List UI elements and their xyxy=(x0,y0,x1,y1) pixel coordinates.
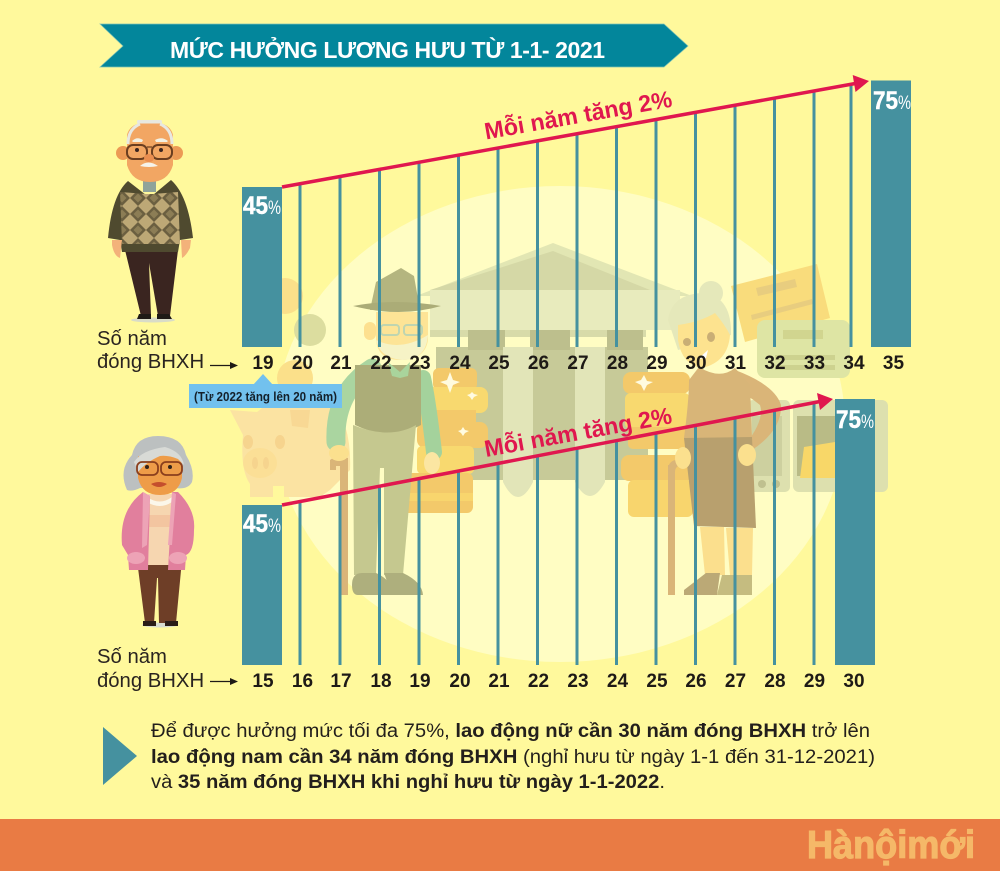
75 percent bar female: 75 xyxy=(836,406,861,434)
year axis female: 22 xyxy=(528,671,549,692)
year axis male: 21 xyxy=(330,353,352,374)
pale circle xyxy=(275,186,845,662)
arrow male xyxy=(282,75,869,187)
note line 1: Để được hưởng mức tối đa 75%, lao động nữ cần 30 năm đóng BHXH trở lên xyxy=(151,721,870,742)
year axis male: 23 xyxy=(409,353,431,374)
year axis male: 34 xyxy=(843,353,865,374)
chart: male pension rate xyxy=(97,75,911,408)
footer bar xyxy=(0,819,1000,871)
year axis male: 24 xyxy=(449,353,471,374)
label: increase per year male: Mỗi năm tăng 2% xyxy=(482,85,674,144)
year axis female: 18 xyxy=(370,671,392,692)
note line 3: và 35 năm đóng BHXH khi nghỉ hưu từ ngày 1-1-2022 . xyxy=(151,772,665,793)
callout: from 2022: (Từ 2022 tăng lên 20 năm) xyxy=(194,389,337,404)
75 percent bar female: % xyxy=(861,412,874,433)
year axis female: 28 xyxy=(764,671,786,692)
old woman xyxy=(668,281,781,595)
axis caption female: Số năm xyxy=(97,646,167,668)
axis caption male xyxy=(97,328,238,373)
year axis male: 32 xyxy=(764,353,786,374)
year axis male: 25 xyxy=(488,353,510,374)
axis caption male: Số năm xyxy=(97,328,167,350)
75 percent bar male: % xyxy=(898,93,911,114)
note line 2: lao động nam cần 34 năm đóng BHXH (nghỉ hưu từ ngày 1-1 đến 31-12-2021) xyxy=(151,747,875,768)
piggy bank xyxy=(230,278,350,497)
bank building xyxy=(416,243,692,497)
year axis male: 19 xyxy=(252,353,274,374)
year axis male: 30 xyxy=(685,353,707,374)
year axis male xyxy=(252,353,904,374)
coin stack right xyxy=(621,372,693,517)
thin year bars female xyxy=(300,403,814,665)
year axis female: 20 xyxy=(449,671,471,692)
logo: Hà Nội Mới: Hànộimới xyxy=(807,824,975,867)
axis caption female: đóng BHXH xyxy=(97,670,204,692)
chart: female pension rate xyxy=(97,393,875,692)
note: footer explanation xyxy=(103,721,875,793)
year axis male: 28 xyxy=(607,353,628,374)
year axis female: 26 xyxy=(685,671,707,692)
credit cards xyxy=(731,264,850,378)
year axis female: 25 xyxy=(646,671,668,692)
45 percent bar male xyxy=(242,187,282,347)
icon: old woman character xyxy=(122,436,194,628)
old man xyxy=(329,268,441,595)
icon: play triangle xyxy=(103,727,137,785)
45 percent bar female: 45 xyxy=(243,510,268,538)
phones and gold xyxy=(748,400,888,492)
year axis male: 33 xyxy=(804,353,825,374)
year axis female: 16 xyxy=(292,671,313,692)
axis caption male: đóng BHXH xyxy=(97,351,204,373)
thin year bars male xyxy=(300,84,851,347)
year axis female: 19 xyxy=(409,671,431,692)
year axis female: 27 xyxy=(725,671,746,692)
icon: old man character xyxy=(108,120,193,322)
45 percent bar female: % xyxy=(268,516,281,537)
year axis female: 15 xyxy=(252,671,274,692)
year axis male: 29 xyxy=(646,353,668,374)
arrow female xyxy=(282,393,833,505)
title text: MỨC HƯỞNG LƯƠNG HƯU TỪ 1-1- 2021 xyxy=(170,35,605,63)
year axis female: 29 xyxy=(804,671,825,692)
year axis female: 17 xyxy=(330,671,352,692)
year axis female xyxy=(252,671,865,692)
year axis male: 35 xyxy=(883,353,904,374)
year axis male: 31 xyxy=(725,353,746,374)
axis caption female xyxy=(97,646,238,692)
45 percent bar female xyxy=(242,505,282,665)
45 percent bar male: 45 xyxy=(243,192,268,220)
year axis male: 22 xyxy=(370,353,392,374)
label: increase per year female: Mỗi năm tăng 2% xyxy=(482,401,674,462)
callout: from 2022 xyxy=(189,374,342,408)
75 percent bar male xyxy=(871,80,911,347)
coin stack left xyxy=(387,368,488,513)
year axis female: 23 xyxy=(567,671,589,692)
year axis female: 30 xyxy=(843,671,865,692)
45 percent bar male: % xyxy=(268,198,281,219)
title banner xyxy=(100,24,688,67)
year axis male: 27 xyxy=(567,353,589,374)
background illustration: pension scene xyxy=(230,186,888,662)
year axis male: 20 xyxy=(292,353,313,374)
75 percent bar male: 75 xyxy=(873,87,898,115)
75 percent bar female xyxy=(835,399,875,665)
year axis female: 24 xyxy=(607,671,628,692)
year axis female: 21 xyxy=(488,671,510,692)
year axis male: 26 xyxy=(528,353,549,374)
